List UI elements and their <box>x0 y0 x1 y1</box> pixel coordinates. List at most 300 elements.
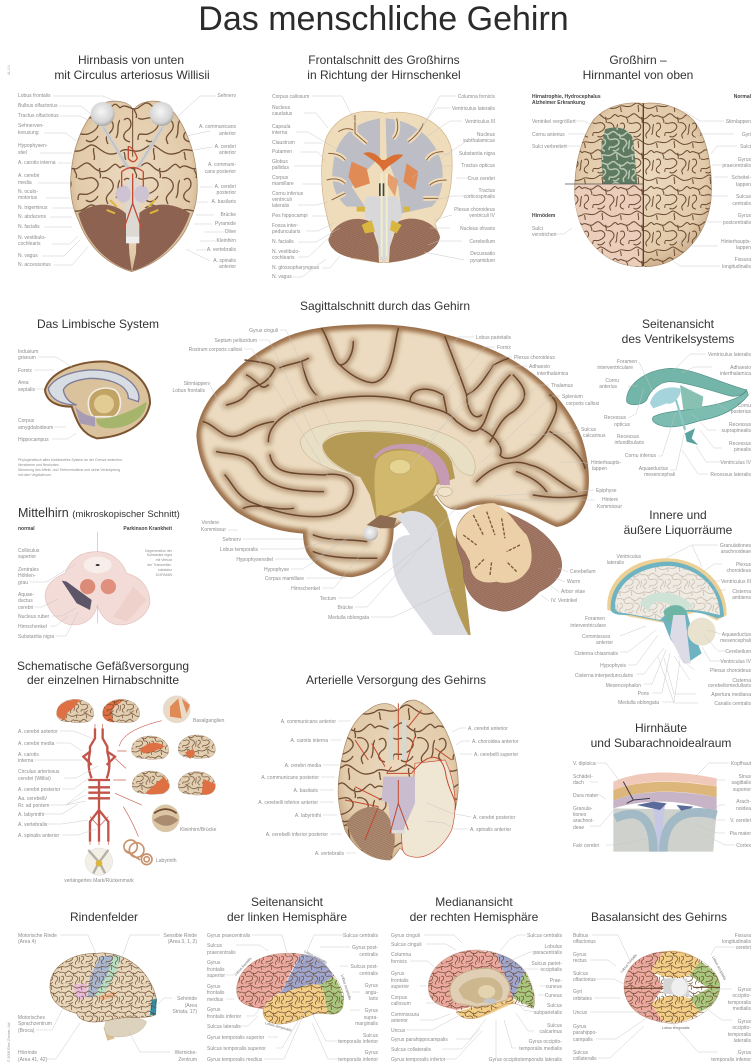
labels right: postcentralis <box>723 220 751 226</box>
heading <box>583 53 693 82</box>
labels right: Stirnlappen <box>726 119 751 125</box>
labels right: Gyrus <box>365 1050 378 1056</box>
labels left: Commissura <box>391 1012 419 1018</box>
labels left: Sulcus lateralis <box>207 1024 241 1030</box>
labels left: Ventriculus <box>617 554 641 560</box>
illustration: limbic system <box>45 361 150 438</box>
thalamus <box>374 450 437 522</box>
labels left: Commissura <box>582 634 610 640</box>
panel: Rindenfelder <box>18 910 197 1063</box>
labels left: callosum <box>391 1001 411 1007</box>
labels left: frontalis <box>207 990 225 996</box>
labels right: Sulcus <box>547 1023 562 1029</box>
arbor vitae <box>456 503 532 583</box>
labels right: Tractus <box>479 188 496 194</box>
labels left: N. glossopharyngeus <box>272 265 319 271</box>
labels: Indusium <box>18 349 38 355</box>
labels left: Corpus callosum <box>272 94 309 100</box>
labels right: Plexus choroideus <box>514 355 555 361</box>
labels right: Ventriculus III <box>465 119 495 125</box>
labels right: pinealis <box>734 447 751 453</box>
labels left: cochlearis <box>272 255 295 261</box>
heading: Schematische Gefäßversorgung <box>17 659 189 673</box>
labels right: Kopfhaut <box>731 761 752 767</box>
labels right: Parkinson Krankheit <box>123 526 172 532</box>
labels left: Gyrus <box>207 1007 221 1013</box>
labels left top <box>172 328 369 621</box>
illustration: meninges <box>613 772 717 852</box>
labels right <box>711 933 751 1063</box>
labels left: Substantia nigra <box>18 634 54 640</box>
labels left top: Medulla oblongata <box>328 615 369 621</box>
labels left <box>18 526 54 640</box>
labels right: Gyrus <box>738 987 751 993</box>
labels left: N. vestibulo- <box>18 235 46 241</box>
labels right: V. cerebri <box>730 818 751 824</box>
pineal <box>438 487 452 496</box>
lobe labels: Lobus temporalis <box>662 1026 690 1030</box>
labels right: posterius <box>731 409 751 415</box>
labels: A. vertebralis <box>18 822 48 828</box>
labels left: Capsula <box>272 124 291 130</box>
labels left: Nucleus ruber <box>18 614 49 620</box>
panel: Basalansicht <box>573 910 751 1063</box>
labels right: Sulcus centralis <box>527 933 562 939</box>
labels left: Medulla oblongata <box>618 700 659 706</box>
labels right: cerebri <box>736 945 751 951</box>
labels right: Gyrus occipito- <box>529 1039 562 1045</box>
labels left: frontalis inferior <box>207 1014 242 1020</box>
labels left: Gyri <box>573 989 582 995</box>
labels right: temporalis <box>728 1000 751 1006</box>
labels left: (Area 41, 42) <box>18 1057 48 1063</box>
labels right: Tractus opticus <box>461 163 495 169</box>
labels right: Nucleus olivaris <box>460 226 495 232</box>
labels right: Cisterna <box>732 678 751 684</box>
leader lines <box>226 935 360 1059</box>
labels left top: Lobus temporalis <box>220 547 258 553</box>
panel: Hirnbasis von unten <box>18 53 236 272</box>
labels left: Colliculus <box>18 548 40 554</box>
leader lines <box>30 564 78 636</box>
labels right: Plexus <box>736 562 751 568</box>
labels left: A. cerebri media <box>285 763 321 769</box>
labels right: lappen <box>736 182 751 188</box>
labels left: Lobus frontalis <box>18 93 51 99</box>
leader lines <box>38 96 224 265</box>
labels right: A. cerebri <box>215 144 236 150</box>
labels: Rr. ad pontem <box>18 803 49 809</box>
labels: interna <box>18 758 34 764</box>
labels right: Arbor vitae <box>561 589 585 595</box>
brainstem <box>392 511 468 635</box>
labels right <box>708 543 752 707</box>
labels right: paracentralis <box>533 950 562 956</box>
labels right: Cerebellum <box>469 239 495 245</box>
labels left: interventriculare <box>570 623 606 629</box>
labels right: Decussatio <box>470 251 495 257</box>
labyrinth <box>124 840 152 865</box>
panel: Hirnhaeute <box>573 721 752 852</box>
leader lines <box>590 763 735 845</box>
labels left: superior <box>391 984 409 990</box>
arteries <box>83 728 115 842</box>
labels: Hippocampus <box>18 437 49 443</box>
labels: cerebri (Willisi) <box>18 776 51 782</box>
labels: verlängertes Mark/Rückenmark <box>64 878 134 884</box>
labels left: interna <box>272 130 288 136</box>
labels left: verstrichen <box>532 232 557 238</box>
labels right: centralis <box>359 971 378 977</box>
illustration: brain base with circle of Willis <box>71 101 197 272</box>
labels right: Gyrus <box>365 1008 378 1014</box>
labels right: occipito- <box>732 1025 751 1031</box>
heading: und Subarachnoidealraum <box>591 736 731 750</box>
labels left: frontalis <box>207 967 225 973</box>
labels: Circulus arteriosus <box>18 769 60 775</box>
labels right: occipitalis <box>540 967 562 973</box>
labels right: Kleinhirn <box>217 238 236 244</box>
labels right: Gyrus <box>738 1019 751 1025</box>
labels left <box>570 554 659 706</box>
labels left: cochlearis <box>18 241 41 247</box>
labels: A. cerebri media <box>18 741 55 747</box>
labels left: Gyrus temporalis inferior <box>391 1057 446 1063</box>
labels right: Epiphyse <box>596 488 617 494</box>
labels left: Hypophysis <box>600 663 626 669</box>
Parkinson note: substanz <box>158 568 172 572</box>
cerebrum <box>197 325 589 577</box>
illustration: CSF spaces <box>607 558 727 663</box>
labels right: noidea <box>736 806 751 812</box>
labels right: Cortex <box>736 843 751 849</box>
labels left: N. abducens <box>18 214 47 220</box>
labels right: Normal <box>734 94 752 100</box>
labels right: A. vertebralis <box>207 247 236 253</box>
labels right: centralis <box>359 952 378 958</box>
labels left: N. oculo- <box>18 189 38 195</box>
labels right: centralis <box>732 201 751 207</box>
labels left: Fossa inter- <box>272 223 299 229</box>
labels left: Mesencephalon <box>606 683 641 689</box>
labels right: A. cerebri posterior <box>473 815 516 821</box>
labels left: Sulcus collateralis <box>391 1047 432 1053</box>
labels right: mesencephali <box>720 638 751 644</box>
labels right: A. cerebri <box>215 184 236 190</box>
brain 3 <box>132 736 169 759</box>
labels left: Ventrikel vergrößert <box>532 119 576 125</box>
lobe labels: Lobus occipitalis <box>711 956 727 981</box>
labels right: Brücke <box>220 212 236 218</box>
illustration: cerebrum top view <box>565 103 711 267</box>
labels right: Gyrus <box>738 157 751 163</box>
labels left: Nucleus <box>272 105 291 111</box>
labels left: Aquae- <box>18 592 34 598</box>
Parkinson note <box>145 549 173 577</box>
labels right: arachnoideae <box>721 549 751 555</box>
labels left: campalis <box>573 1037 593 1043</box>
brain 6 <box>178 772 215 795</box>
labels left <box>258 719 344 857</box>
labels right: Wurm <box>567 579 580 585</box>
labels right: Recessus lateralis <box>710 472 751 478</box>
labels left: Hirnatrophie, Hydrocephalus <box>532 94 601 100</box>
labels right: Sehnerv <box>217 93 236 99</box>
labels left: Claustrum <box>272 140 295 146</box>
labels left: caudatus <box>272 111 293 117</box>
labels right: Sulcus centralis <box>343 933 378 939</box>
labels left: N. facialis <box>272 239 294 245</box>
labels right: Plexus choroideus <box>710 668 751 674</box>
labels: Basalganglien <box>193 718 225 724</box>
labels right: medialis <box>733 1006 751 1012</box>
heading: Sagittalschnitt durch das Gehirn <box>300 299 470 313</box>
illustration: vessel schema <box>57 696 215 875</box>
labels left top: Brücke <box>337 605 353 611</box>
labels right: suprapinealis <box>722 428 751 434</box>
leader lines <box>292 96 470 277</box>
labels left: Hirnschenkel <box>18 624 47 630</box>
heading: Das Limbische System <box>37 317 159 331</box>
labels right <box>476 335 622 604</box>
labels: septalis <box>18 387 35 393</box>
lobe labels <box>620 953 727 1030</box>
labels right: Sehrinde <box>177 996 197 1002</box>
labels left: Foramen <box>585 616 605 622</box>
labels right: Columna fornicis <box>458 94 495 100</box>
note text <box>18 458 122 477</box>
pituitary <box>363 526 378 541</box>
labels <box>18 718 225 884</box>
heading: Hirnbasis von unten <box>78 53 184 67</box>
panel: Schematische Gefaessversorgung <box>17 659 225 884</box>
labels right: Fornix <box>497 345 511 351</box>
labels left: Hypophysen- <box>18 143 48 149</box>
labels: A. labyrinthi <box>18 812 44 818</box>
labels left: Motorische Rinde <box>18 933 57 939</box>
illustration: frontal section <box>322 111 452 263</box>
labels left: Sulcus <box>573 1050 589 1056</box>
labels left: Falx cerebri <box>573 843 599 849</box>
labels right: lappen <box>736 245 751 251</box>
heading: Seitenansicht <box>251 895 324 909</box>
heading <box>622 317 734 346</box>
labels left: Granula- <box>573 806 593 812</box>
labels left: Putamen <box>272 149 292 155</box>
labels right: Aquaeductus <box>722 632 751 638</box>
brain 2 <box>103 699 140 723</box>
panel: Medianansicht der rechten Hemisphaere <box>391 895 562 1063</box>
note text: Hirnstamm und Neokortex. <box>18 463 60 467</box>
heading <box>227 895 347 924</box>
labels left: motorius <box>18 195 38 201</box>
labels left: Uncus <box>391 1028 406 1034</box>
labels left top: Gyrus cinguli <box>249 328 278 334</box>
Parkinson note: DOPAMIN <box>156 573 172 577</box>
labels left: Sulci <box>532 226 543 232</box>
panel: Frontalschnitt <box>272 53 496 280</box>
labels left: N. vagus <box>272 274 292 280</box>
labels left: frontalis <box>391 978 409 984</box>
brain 4 <box>178 735 215 759</box>
labels left: Gyrus cinguli <box>391 933 420 939</box>
leader lines <box>320 721 472 853</box>
labels right: Substantia nigra <box>459 151 495 157</box>
labels right: Apertura mediana <box>711 692 751 698</box>
labels right: A. spinalis anterior <box>470 827 511 833</box>
labels left <box>391 933 448 1063</box>
heading: der linken Hemisphäre <box>227 910 347 924</box>
labels left: Aquaeductus <box>639 466 668 472</box>
labels right: marginalis <box>355 1021 378 1027</box>
labels right: Ventriculus lateralis <box>708 352 751 358</box>
labels right: Lobus parietalis <box>476 335 512 341</box>
labels left: N. vagus <box>18 253 38 259</box>
labels left: A. carotis interna <box>290 738 328 744</box>
labels right <box>163 933 197 1063</box>
leader lines <box>34 731 98 835</box>
labels left: A. cerebelli inferior anterior <box>258 800 318 806</box>
panel: Mittelhirn <box>18 506 180 640</box>
labels right: Splenium <box>562 394 583 400</box>
leader lines <box>36 935 172 1059</box>
labels right <box>452 94 496 264</box>
copyright note: © 2006 Elsei Zimmer, Ltd. <box>7 1022 11 1062</box>
labels right: Adhaesio <box>529 364 550 370</box>
labels left: ventriculi <box>272 197 292 203</box>
medulla inset <box>85 848 113 875</box>
labels right: occipito- <box>732 993 751 999</box>
labels right: temporalis <box>728 1032 751 1038</box>
heading <box>17 659 189 687</box>
labels right: Lobulus <box>544 944 562 950</box>
labels right: IV. Ventrikel <box>551 598 577 604</box>
labels right: ventriculi IV <box>469 213 496 219</box>
labels right: Prae- <box>550 978 562 984</box>
labels right: pyramidum <box>470 258 495 264</box>
labels right: Ventriculus IV <box>720 659 752 665</box>
labels right: Sulcus post- <box>350 964 378 970</box>
labels left <box>18 93 59 268</box>
labels right: calcarinus <box>539 1029 562 1035</box>
labels left <box>597 359 675 478</box>
labels right: temporalis inferior <box>711 1057 751 1063</box>
labels right: Cuneus <box>545 993 562 999</box>
labels left: fornicis <box>391 959 407 965</box>
labels right: subparietalis <box>534 1010 562 1016</box>
labels right: Cisterna <box>732 589 751 595</box>
labels left: Pes hippocampi <box>272 213 308 219</box>
labels left top: Vordere <box>201 520 219 526</box>
labels left: superior <box>207 973 225 979</box>
labels right <box>199 93 236 270</box>
labels right: Adhaesio <box>730 365 751 371</box>
labels right: cans posterior <box>205 169 236 175</box>
labels right: Gyrus <box>738 1050 751 1056</box>
labels left: mamillare <box>272 181 294 187</box>
labels left: (Broca) <box>18 1028 35 1034</box>
labels left: Sulcus <box>573 971 589 977</box>
poster code: AL114 <box>7 65 11 75</box>
labels left: olfactorius <box>573 939 596 945</box>
labels: A. cerebri posterior <box>18 787 61 793</box>
leader lines <box>406 935 546 1059</box>
plexus <box>373 444 450 485</box>
labels: A. carotis <box>18 752 39 758</box>
lobe labels: Lobus frontalis <box>620 953 638 974</box>
labels left: Pons <box>638 691 649 697</box>
labels right: Nucleus <box>477 132 495 138</box>
labels: griseum <box>18 355 36 361</box>
labels left top: Corpus mamillare <box>265 576 304 582</box>
labels left: pallidus <box>272 165 289 171</box>
labels right: Thalamus <box>551 383 573 389</box>
heading: Medianansicht <box>435 895 513 909</box>
labels right <box>730 761 752 849</box>
labels left: praecentralis <box>207 950 236 956</box>
labels right: Hinterhaupts- <box>721 239 751 245</box>
heading: Frontalschnitt des Großhirns <box>308 53 460 67</box>
labels left: Tractus olfactorius <box>18 113 59 119</box>
labels right: cerebellomedullaris <box>708 683 751 689</box>
labels left top: Septum pellucidum <box>214 338 257 344</box>
leader lines <box>556 111 737 266</box>
labels left: parahippo- <box>573 1030 597 1036</box>
labels left: interventriculare <box>597 365 633 371</box>
labels right: subthalamicus <box>463 138 495 144</box>
labels: A. spinalis anterior <box>18 833 59 839</box>
labels right: Cornu <box>737 403 751 409</box>
labels right: A. choroidea anterior <box>472 739 519 745</box>
labels left: Recessus <box>617 434 640 440</box>
labels <box>18 349 53 443</box>
labels right: Ventriculus lateralis <box>452 106 495 112</box>
labels left: Sulcus temporalis superior <box>207 1046 266 1052</box>
labels left: A. vertebralis <box>315 851 344 857</box>
brain 5 <box>132 771 170 794</box>
labels right: Cerebellum <box>570 569 596 575</box>
labels right: Scheitel- <box>732 175 751 181</box>
labels left: Cisterna chiasmatis <box>574 651 618 657</box>
labels left: normal <box>18 526 35 532</box>
labels right: Sulcus pariet- <box>531 961 562 967</box>
leader lines <box>209 330 595 617</box>
labels left: lateralis <box>607 560 624 566</box>
labels right <box>708 352 752 478</box>
labels right: supra- <box>364 1015 378 1021</box>
labels left: Hirnödem <box>532 213 556 219</box>
heading <box>307 53 461 82</box>
illustration: arterial supply <box>338 700 458 860</box>
labels left: A. carotis interna <box>18 160 56 166</box>
labels left: Alzheimer Erkrankung <box>532 100 585 106</box>
labels left: Gyrus temporalis medius <box>207 1057 263 1063</box>
heading: Arterielle Versorgung des Gehirns <box>306 673 486 687</box>
labels right: calcarinus <box>583 433 606 439</box>
labels right: Hinterhaupts- <box>591 460 621 466</box>
labels left: A. cerebri <box>18 173 39 179</box>
labels left: N. accessorius <box>18 262 51 268</box>
labels left: Dura mater <box>573 793 598 799</box>
labels left: mesencephali <box>644 472 675 478</box>
heading: in Richtung der Hirnschenkel <box>307 68 461 82</box>
labels left: media <box>18 180 32 186</box>
labels right: Cerebellum <box>725 649 751 655</box>
labels left: N. vestibulo- <box>272 249 300 255</box>
labels right: Sulci <box>740 144 751 150</box>
labels left: Corpus <box>272 175 289 181</box>
labels right: ambiens <box>732 595 751 601</box>
